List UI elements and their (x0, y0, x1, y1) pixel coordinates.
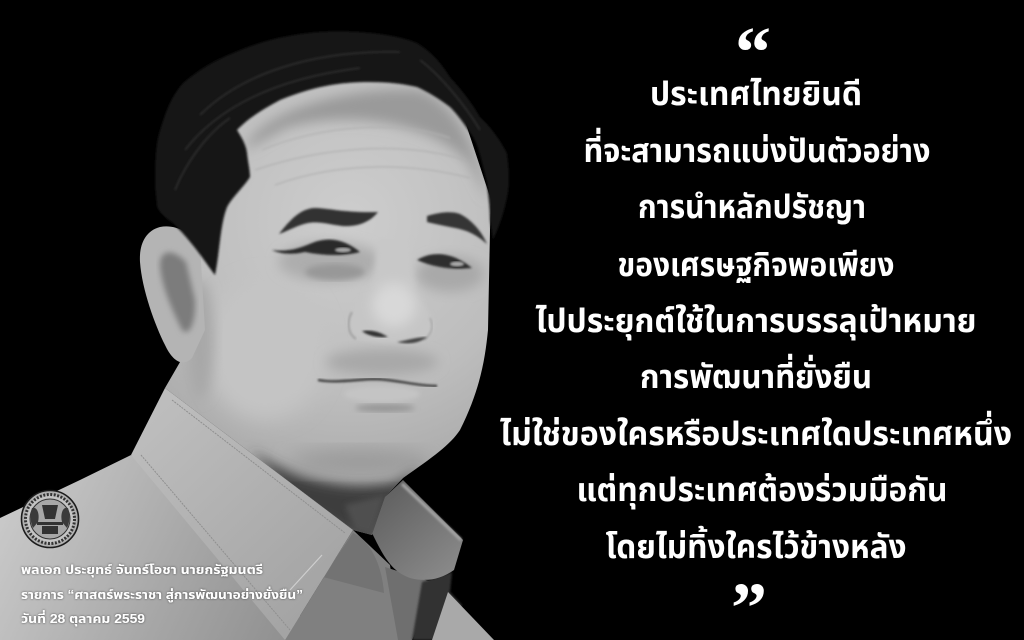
lip shadow (355, 404, 415, 412)
quote line 5: ไปประยุกต์ใช้ในการบรรลุเป้าหมาย (536, 302, 976, 341)
right nostril (397, 337, 427, 343)
quote text (500, 75, 1012, 565)
inner collar flap (323, 533, 384, 593)
caption line 2: รายการ “ศาสตร์พระราชา สู่การพัฒนาอย่างยั่งยืน” (21, 586, 303, 603)
mouth line (318, 379, 437, 386)
hair sheen (175, 52, 480, 190)
shirt front under collar (285, 530, 400, 640)
neck (346, 497, 382, 532)
left eyebrow (279, 208, 378, 234)
chin shading (290, 450, 430, 474)
seal bowl motif (37, 505, 63, 534)
quote line 3: การนำหลักปรัชญา (638, 188, 866, 225)
portrait photograph (0, 31, 509, 640)
right shirt body (432, 592, 494, 640)
quote line 9: โดยไม่ทิ้งใครไว้ข้างหลัง (606, 525, 906, 565)
lapel edge highlight (402, 484, 461, 540)
right eye white (450, 262, 464, 266)
quote line 1: ประเทศไทยยินดี (650, 75, 862, 112)
right eye socket (416, 256, 484, 292)
face and neck (165, 80, 491, 535)
left nose crease (349, 312, 356, 339)
opening quotation mark: “ (735, 12, 771, 92)
quote line 2: ที่จะสามารถแบ่งปันตัวอย่าง (584, 127, 930, 169)
nose bridge (374, 254, 383, 272)
left nostril (362, 330, 388, 337)
caption line 3: วันที่ 28 ตุลาคม 2559 (21, 610, 145, 626)
quote line 6: การพัฒนาที่ยั่งยืน (640, 353, 872, 395)
inner ear (160, 253, 195, 332)
quote line 7: ไม่ใช่ของใครหรือประเทศใดประเทศหนึ่ง (500, 410, 1012, 452)
seal inner field (30, 499, 70, 539)
left cheek wash (216, 348, 296, 419)
shirt body (0, 455, 300, 640)
dark shirt opening (412, 572, 462, 640)
right eye (417, 254, 472, 269)
forehead wrinkles (258, 130, 436, 185)
philtrum shade (326, 349, 438, 375)
left under-eye (305, 264, 365, 280)
right lapel (372, 480, 463, 580)
left eye (272, 240, 360, 255)
nose highlight (372, 283, 416, 327)
right eyebrow (427, 212, 487, 244)
collar stitching (141, 400, 345, 630)
hairline shadow (245, 89, 488, 200)
hair (155, 31, 509, 275)
collar crease (290, 555, 322, 590)
caption line 1: พลเอก ประยุทธ์ จันทร์โอชา นายกรัฐมนตรี (21, 563, 264, 577)
right nose crease (424, 318, 432, 340)
seal left guardian (31, 508, 39, 528)
left eye white (335, 248, 351, 252)
shirt placket (385, 567, 438, 640)
quote line 4: ของเศรษฐกิจพอเพียง (618, 246, 894, 283)
seal right guardian (61, 508, 69, 528)
caption (21, 563, 303, 626)
nose wings (349, 290, 433, 343)
seal text ring (26, 494, 74, 544)
left face edge shading (186, 280, 214, 400)
main collar (131, 388, 353, 640)
emblem seal (22, 490, 78, 548)
lower lip (373, 391, 416, 400)
under-jaw shadow (251, 450, 416, 535)
ear (140, 226, 205, 362)
quote line 8: แต่ทุกประเทศต้องร่วมมือกัน (576, 471, 948, 510)
left eye socket (278, 242, 382, 282)
